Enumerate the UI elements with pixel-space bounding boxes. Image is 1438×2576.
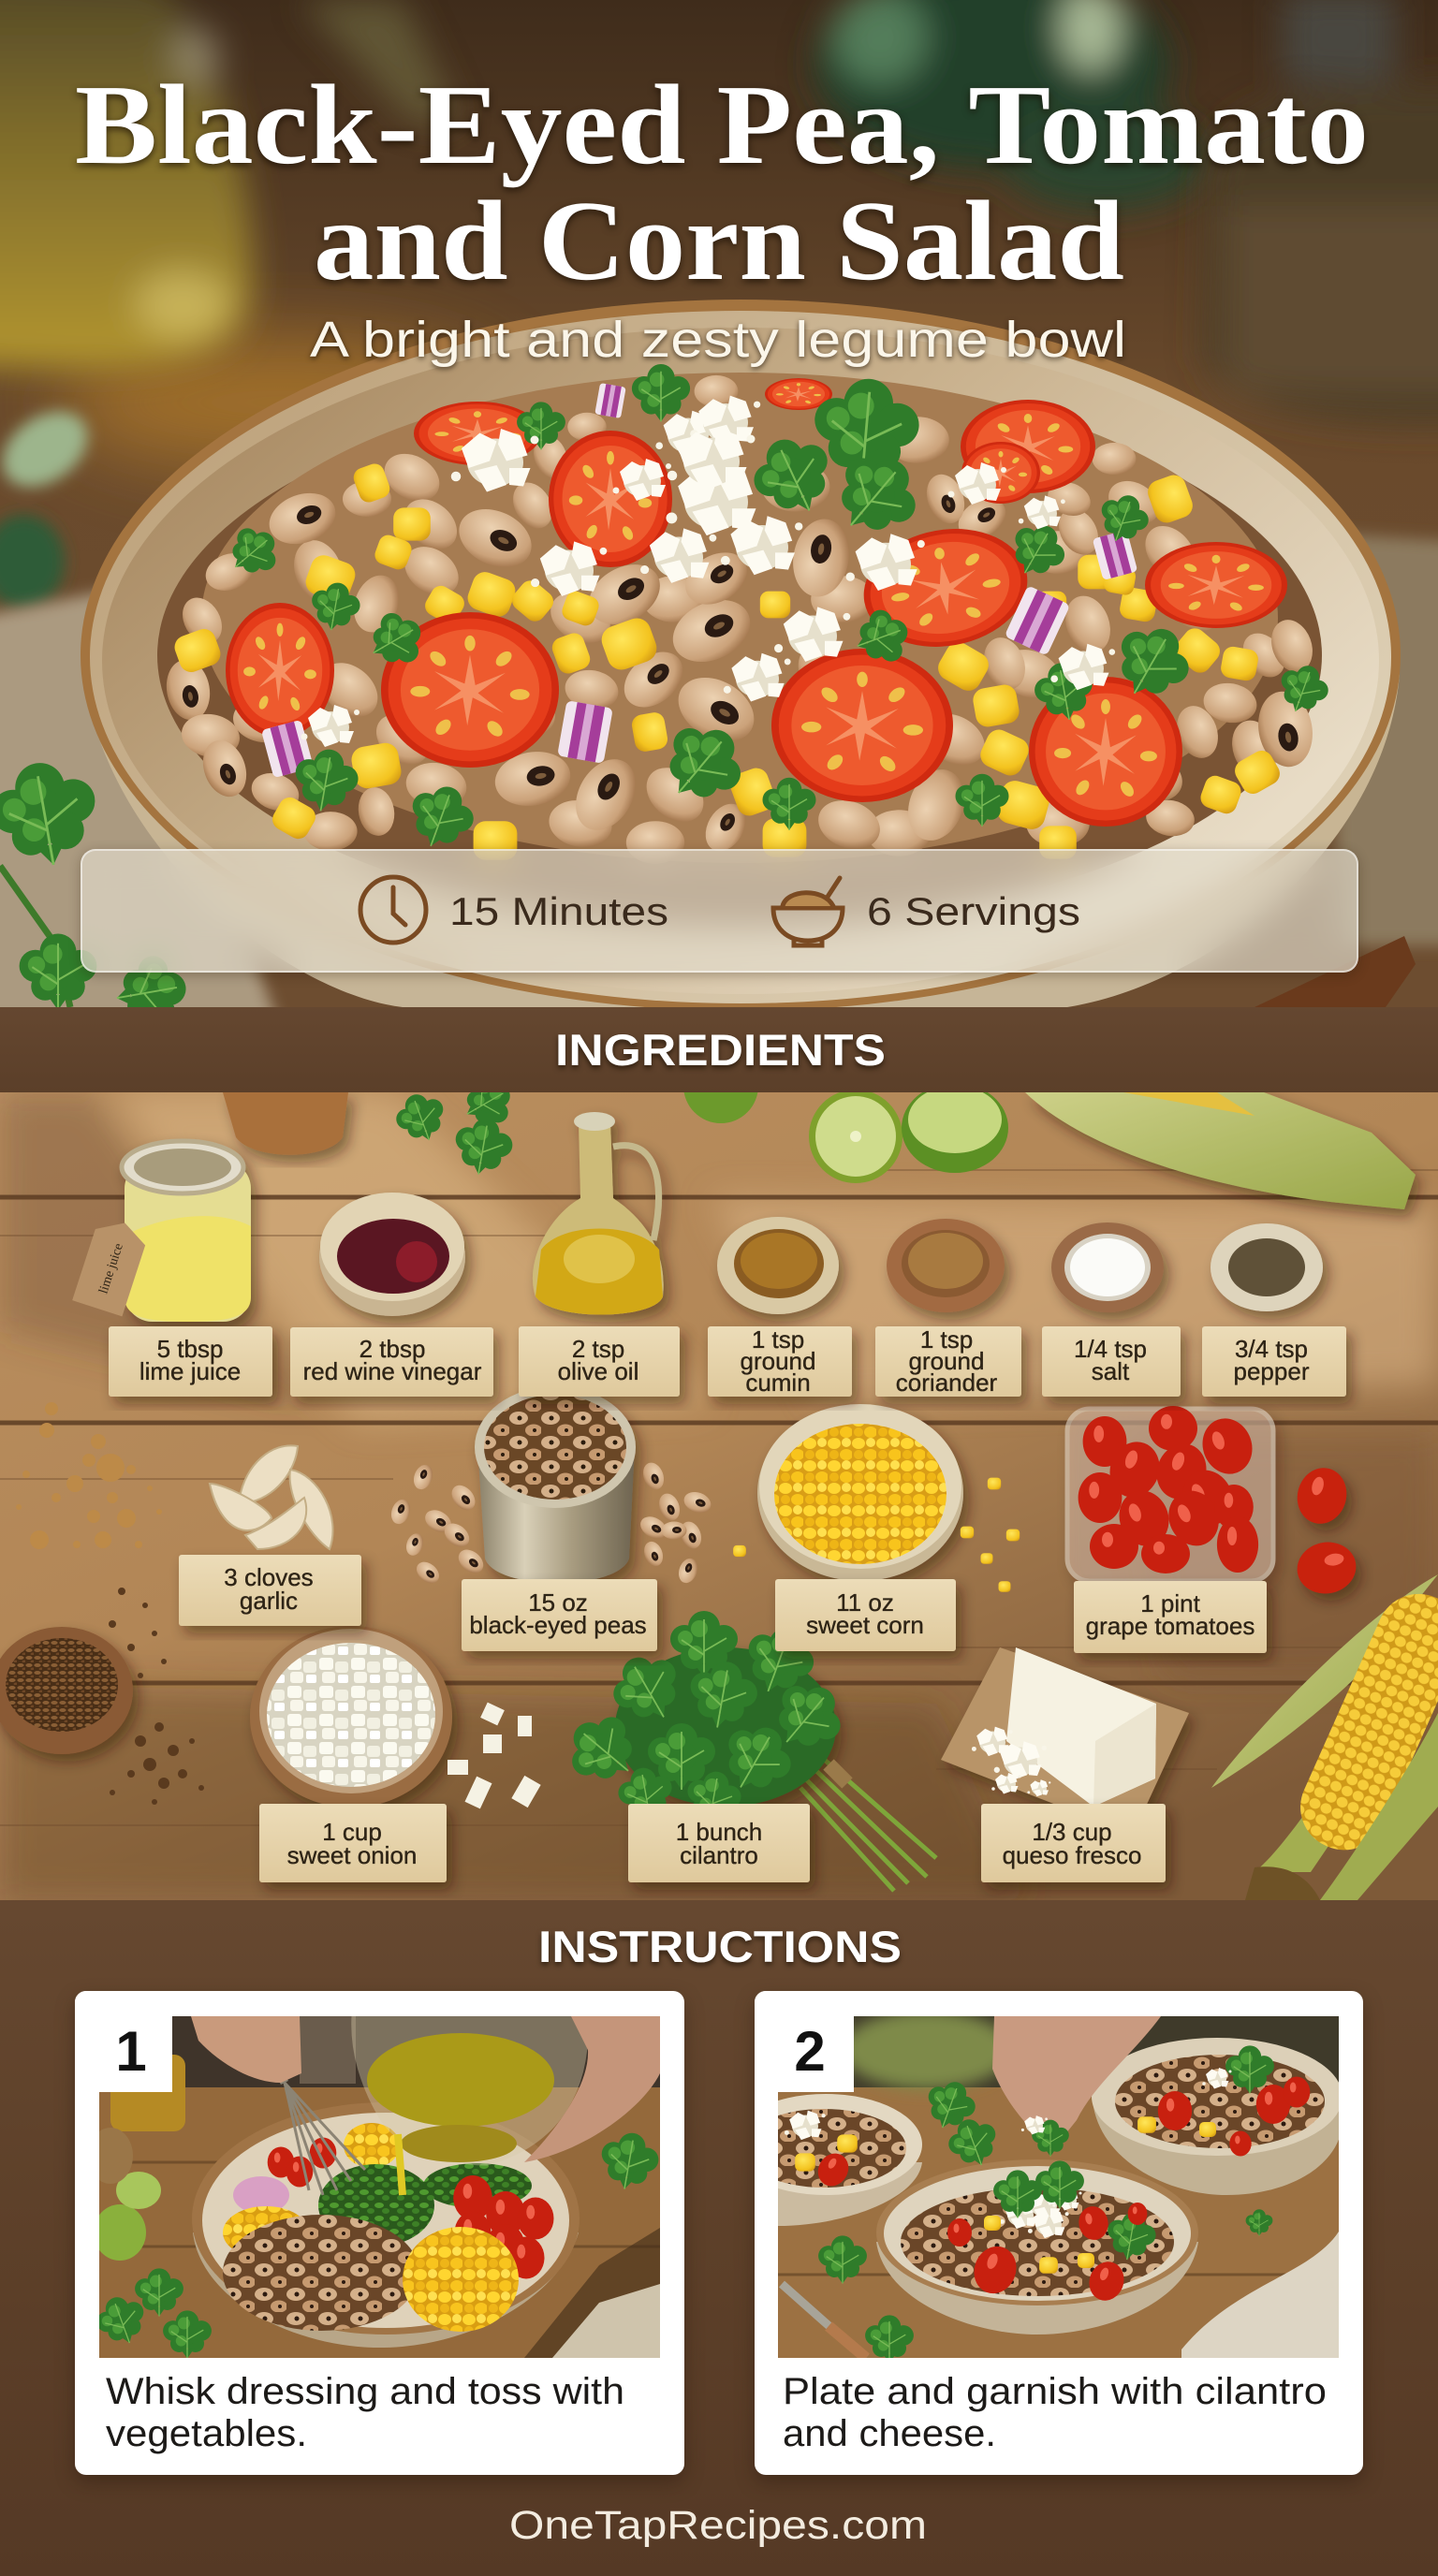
step 1 photo: whisking and pouring dressing	[88, 2016, 663, 2358]
label: ground coriander: coriander	[896, 1368, 998, 1397]
time text: 15 Minutes	[449, 889, 668, 933]
scattered leaves	[818, 2074, 1321, 2363]
step 2 text: and cheese.	[783, 2413, 996, 2454]
panel: ingredients table	[0, 1048, 1438, 1900]
label: grape tomatoes: grape tomatoes	[1086, 1612, 1255, 1640]
label: queso fresco: 1/3 cup	[1032, 1818, 1112, 1846]
can of black-eyed peas	[475, 1386, 636, 1583]
salt bowl	[1051, 1222, 1164, 1312]
small cilantro leaves	[220, 364, 1334, 856]
label: pepper	[1202, 1326, 1346, 1397]
label: garlic: 3 cloves	[224, 1563, 314, 1591]
napkin	[552, 2284, 660, 2358]
step 2 photo: plating and garnishing	[729, 2011, 1343, 2363]
servings text: 6 Servings	[867, 889, 1080, 933]
label: ground cumin: cumin	[745, 1368, 811, 1397]
jar tag: lime juice	[96, 1242, 126, 1295]
icon: clock	[360, 877, 426, 943]
small spice bowl	[0, 1627, 133, 1754]
main bowl	[876, 2242, 1198, 2334]
jar tag	[72, 1215, 150, 1316]
ingredients heading band: INGREDIENTS	[555, 1025, 886, 1075]
bowl outer body	[84, 674, 1400, 1007]
label: red wine vinegar: red wine vinegar	[303, 1357, 482, 1385]
coriander bowl	[887, 1219, 1005, 1312]
large cilantro garnish	[741, 374, 933, 551]
panel: instructions background	[0, 1900, 1438, 2576]
label: ground coriander: ground	[909, 1347, 984, 1375]
card: step 2	[729, 1991, 1363, 2475]
bowl of sweet corn	[757, 1404, 963, 1581]
back right bowl	[1093, 2097, 1341, 2195]
sunlight streaks	[0, 1092, 1438, 1900]
subtitle: A bright and zesty legume bowl	[310, 312, 1126, 368]
bottle of olive oil	[533, 1112, 664, 1315]
bowl contents	[268, 2138, 336, 2187]
left hand	[191, 2016, 301, 2083]
cilantro sprig top	[390, 1069, 521, 1179]
garlic cloves	[210, 1445, 333, 1549]
label: olive oil	[519, 1326, 680, 1397]
tomatoes	[226, 378, 1287, 827]
salad mound	[157, 364, 1334, 927]
right hand	[524, 2016, 660, 2162]
step 2 number tab: 2	[794, 2020, 826, 2083]
label: lime juice: 5 tbsp	[157, 1335, 223, 1363]
label: red wine vinegar: 2 tbsp	[360, 1335, 425, 1363]
step 2 text: Plate and garnish with cilantro	[783, 2371, 1327, 2412]
loose onion pieces	[448, 1703, 541, 1808]
blurred olive oil bottle	[0, 0, 253, 369]
label: cilantro: 1 bunch	[676, 1818, 762, 1846]
label: ground coriander: 1 tsp	[920, 1325, 973, 1354]
corn in husk top right	[1025, 1092, 1416, 1209]
label: sweet corn: 11 oz	[836, 1588, 894, 1617]
instructions heading: INSTRUCTIONS	[538, 1922, 902, 1971]
wooden board	[1255, 936, 1416, 1007]
label: grape tomatoes: 1 pint	[1140, 1589, 1201, 1617]
label: salt	[1042, 1326, 1181, 1397]
jar of lime juice	[122, 1141, 251, 1322]
step 1 text	[106, 2371, 624, 2454]
spilled spices	[109, 1588, 204, 1805]
hero photo: salad bowl on table	[0, 0, 1438, 1032]
blurred spice jar	[1203, 0, 1438, 423]
salad bowl	[193, 2232, 579, 2348]
label: salt: salt	[1092, 1357, 1130, 1385]
left cilantro sprig	[0, 754, 192, 1032]
ingredients heading band	[0, 1007, 1438, 1092]
step 2 number tab	[755, 1991, 854, 2092]
container of grape tomatoes	[1067, 1406, 1273, 1581]
bunch of cilantro	[556, 1611, 936, 1891]
icon: bowl with spoon	[773, 878, 843, 945]
red onion pieces	[261, 383, 1137, 778]
label: ground cumin	[708, 1325, 852, 1397]
label: queso fresco: queso fresco	[1003, 1841, 1141, 1869]
queso fresco crumbles	[301, 396, 1115, 747]
table glow	[56, 337, 506, 468]
corn cob with husk bottom right	[1211, 1574, 1438, 1900]
pepper bowl	[1211, 1223, 1323, 1311]
loose grape tomatoes	[1291, 1462, 1360, 1598]
bowl inner wall	[102, 328, 1379, 994]
limes	[88, 2128, 161, 2261]
cumin bowl	[717, 1217, 839, 1314]
title: and Corn Salad	[314, 178, 1124, 304]
label: sweet corn	[775, 1579, 956, 1651]
corn kernels	[171, 461, 1284, 860]
title	[75, 62, 1369, 304]
burlap cloth left and right	[0, 590, 281, 1030]
label: olive oil: olive oil	[558, 1357, 638, 1385]
step 1 number tab: 1	[115, 2020, 147, 2083]
label: lime juice: lime juice	[139, 1357, 241, 1385]
panel: time and servings glass bar	[81, 849, 1358, 973]
label: olive oil: 2 tsp	[572, 1335, 624, 1363]
label: sweet onion	[259, 1804, 447, 1882]
bowl of sweet onion	[250, 1626, 452, 1808]
glass bowl with dressing	[353, 2016, 587, 2164]
label: sweet onion: 1 cup	[322, 1818, 382, 1846]
label: ground cumin: ground	[741, 1347, 815, 1375]
label: lime juice	[109, 1326, 272, 1397]
label: cilantro	[628, 1804, 810, 1882]
left bowl	[778, 2162, 922, 2226]
label: red wine vinegar	[290, 1327, 493, 1397]
dressing stream	[398, 2134, 403, 2195]
fork	[782, 2284, 866, 2358]
footer website: OneTapRecipes.com	[509, 2503, 927, 2548]
spice crumbs left	[16, 1402, 162, 1549]
step 2 text	[783, 2371, 1327, 2454]
whisk	[251, 2016, 365, 2195]
title: Black-Eyed Pea, Tomato	[75, 62, 1369, 188]
napkin	[1181, 2232, 1339, 2358]
card: step 1	[75, 1991, 684, 2475]
label: ground cumin: 1 tsp	[752, 1325, 804, 1354]
label: black-eyed peas	[462, 1579, 657, 1651]
beans	[162, 375, 1319, 864]
blurred greens at top	[300, 0, 1208, 211]
step 1 number tab	[75, 1991, 172, 2092]
pepper grinder	[223, 1092, 348, 1155]
bowl rim	[81, 300, 1401, 1011]
step 1 text: Whisk dressing and toss with	[106, 2371, 624, 2412]
label: pepper: 3/4 tsp	[1235, 1335, 1308, 1363]
label: garlic: garlic	[240, 1587, 298, 1615]
limes	[683, 1048, 1008, 1183]
label: black-eyed peas: black-eyed peas	[469, 1611, 647, 1639]
label: queso fresco	[981, 1804, 1166, 1882]
label: garlic	[179, 1555, 361, 1626]
loose corn	[733, 1478, 1020, 1592]
bowl of red wine vinegar	[319, 1193, 465, 1316]
queso fresco block on paper	[941, 1647, 1189, 1835]
oil bottle behind	[110, 2055, 185, 2131]
loose peas	[388, 1459, 714, 1588]
label: black-eyed peas: 15 oz	[528, 1588, 588, 1617]
label: grape tomatoes	[1074, 1581, 1267, 1653]
label: sweet corn: sweet corn	[806, 1611, 924, 1639]
label: ground coriander	[875, 1325, 1021, 1397]
label: salt: 1/4 tsp	[1074, 1335, 1147, 1363]
garnishing hand	[992, 2016, 1161, 2144]
blurred leaves left	[0, 396, 101, 608]
label: cilantro: cilantro	[680, 1841, 758, 1869]
cilantro sprigs	[91, 2129, 663, 2358]
label: sweet onion: sweet onion	[287, 1841, 417, 1869]
step 1 text: vegetables.	[106, 2413, 307, 2454]
label: pepper: pepper	[1234, 1357, 1310, 1385]
